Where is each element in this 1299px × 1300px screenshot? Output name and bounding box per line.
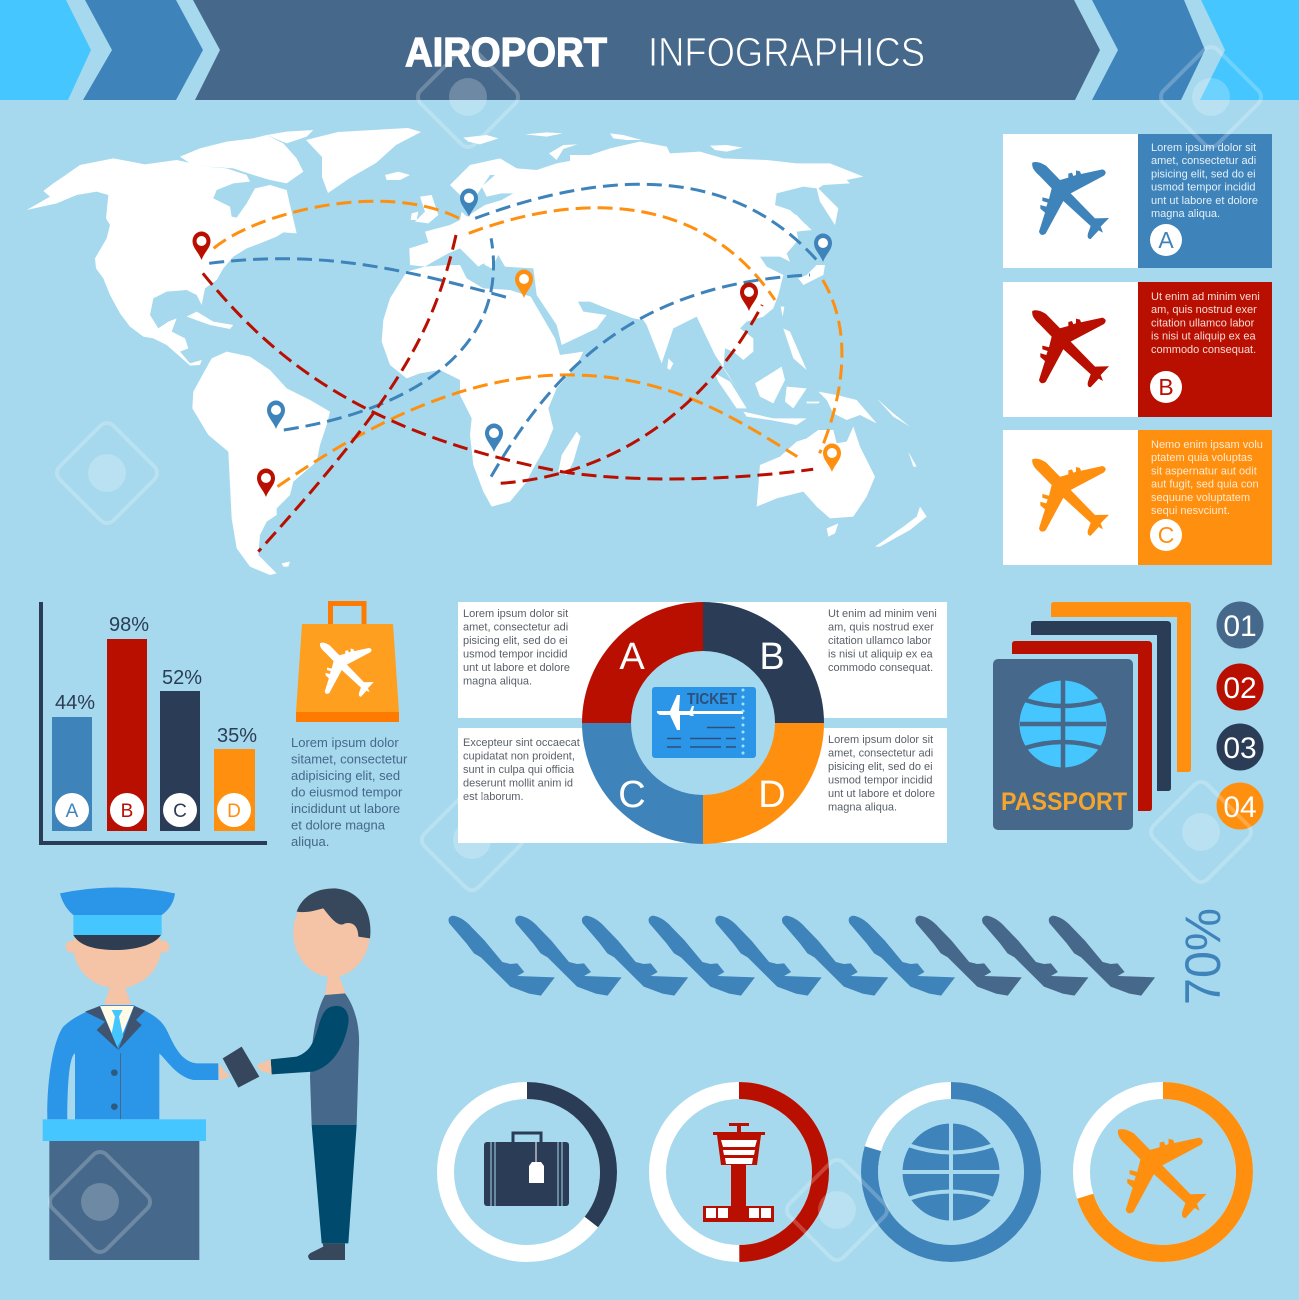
text bottom left: est laborum. <box>463 791 524 803</box>
04 <box>1216 782 1264 830</box>
01 <box>1216 602 1264 648</box>
text bottom right: amet, consectetur adi <box>828 748 933 760</box>
text top left: unt ut labore et dolore <box>463 662 570 674</box>
text top right: Ut enim ad minim veni <box>828 608 937 620</box>
icon: orange plane <box>1032 459 1109 536</box>
text top right: commodo consequat. <box>828 662 933 674</box>
Asia <box>570 133 863 408</box>
badge B <box>1150 371 1182 403</box>
bar B 98%: B <box>121 801 133 822</box>
agent <box>47 887 230 1119</box>
icon: red plane <box>1032 310 1109 387</box>
continents <box>27 128 927 575</box>
bar C 52%: C <box>173 801 187 822</box>
text block A: Lorem ipsum dolor sit <box>1151 142 1256 154</box>
text block B: citation ullamco labor <box>1151 318 1255 330</box>
donut chart <box>582 602 824 844</box>
bar D 35% <box>214 725 257 831</box>
Americas <box>27 130 330 575</box>
text block C <box>1151 439 1263 517</box>
text top right: citation ullamco labor <box>828 635 932 647</box>
text top left: pisicing elit, sed do ei <box>463 635 568 647</box>
text block C: ptatem quia voluptas <box>1151 452 1253 464</box>
flight routes <box>203 184 842 552</box>
Oceania <box>743 392 927 547</box>
icon: shopping bag <box>296 604 399 722</box>
document <box>223 1047 259 1088</box>
text block under bag <box>291 735 408 849</box>
pictogram row: 7 of 10 planes, 70% <box>448 908 1231 1005</box>
icon: passports: PASSPORT <box>1001 788 1127 816</box>
text block under bag: Lorem ipsum dolor <box>291 735 399 750</box>
01: 01 <box>1223 610 1257 643</box>
text bottom left: deserunt mollit anim id <box>463 778 573 790</box>
title: AIROPORT <box>405 29 607 75</box>
text block under bag: aliqua. <box>291 834 329 849</box>
text bottom right: unt ut labore et dolore <box>828 788 935 800</box>
text bottom right <box>828 734 935 814</box>
02: 02 <box>1223 672 1257 705</box>
text top left: amet, consectetur adi <box>463 622 568 634</box>
03: 03 <box>1223 732 1257 765</box>
Europe, Africa, Arabia <box>382 132 633 507</box>
text bottom left: cupidatat non proident, <box>463 750 575 762</box>
icon: globe <box>901 1122 1001 1222</box>
text block A: unt ut labore et dolore <box>1151 195 1258 207</box>
donut chart: A <box>619 636 645 678</box>
icon: blue plane <box>1032 162 1109 239</box>
donut chart: B <box>759 636 785 678</box>
illustration: check-in desk and passenger <box>43 887 370 1260</box>
text block under bag: adipisicing elit, sed <box>291 768 400 783</box>
ring: control tower <box>658 1090 820 1254</box>
panel: ticket donut <box>458 602 947 844</box>
text top left: usmod tempor incidid <box>463 648 568 660</box>
title: INFOGRAPHICS <box>648 29 925 75</box>
title <box>405 29 925 75</box>
text block A: magna aliqua. <box>1151 208 1220 220</box>
bar C 52% <box>160 667 202 831</box>
text block A: usmod tempor incidid <box>1151 182 1256 194</box>
bar C 52%: 52% <box>162 667 202 689</box>
text bottom right: magna aliqua. <box>828 802 897 814</box>
text bottom right: usmod tempor incidid <box>828 774 933 786</box>
ring: luggage <box>446 1090 608 1254</box>
badge B: B <box>1158 374 1174 400</box>
text block B: is nisi ut aliquip ex ea <box>1151 330 1256 342</box>
bar A 44%: A <box>66 801 79 822</box>
text top left: magna aliqua. <box>463 676 532 688</box>
text bottom left <box>463 737 580 803</box>
70% label: 70% <box>1175 908 1231 1005</box>
text block A: amet, consectetur adi <box>1151 155 1256 167</box>
text block C: sit aspernatur aut odit <box>1151 466 1257 478</box>
desk <box>43 1119 206 1260</box>
bar A 44% <box>52 692 95 831</box>
icon: suitcase <box>484 1133 569 1206</box>
03 <box>1216 724 1264 770</box>
bar D 35%: 35% <box>217 725 257 747</box>
text bottom left: sunt in culpa qui officia <box>463 764 575 776</box>
text block under bag: sitamet, consectetur <box>291 752 408 766</box>
text block C: aut fugit, sed quia con <box>1151 478 1259 490</box>
icon: ticket <box>652 687 756 758</box>
icon: passports <box>993 602 1191 830</box>
04: 04 <box>1223 791 1257 824</box>
Greenland <box>306 128 421 193</box>
icon: tower <box>703 1123 774 1222</box>
ring: plane <box>1082 1090 1244 1254</box>
text bottom right: Lorem ipsum dolor sit <box>828 734 933 746</box>
header banner <box>0 0 1299 100</box>
panel: plane A <box>1003 134 1272 268</box>
icon: ticket: TICKET <box>687 691 737 708</box>
text block B: commodo consequat. <box>1151 344 1256 356</box>
text block B: am, quis nostrud exer <box>1151 304 1257 316</box>
02 <box>1216 664 1264 710</box>
text block A: pisicing elit, sed do ei <box>1151 168 1256 180</box>
text bottom right: pisicing elit, sed do ei <box>828 761 933 773</box>
panel: plane B <box>1003 282 1272 417</box>
text block C: sequune voluptatem <box>1151 492 1250 504</box>
bar chart <box>39 602 267 845</box>
bar B 98%: 98% <box>109 614 149 636</box>
numbered list <box>1216 602 1264 830</box>
badge C <box>1150 519 1182 551</box>
text top right: is nisi ut aliquip ex ea <box>828 648 933 660</box>
text block under bag: et dolore magna <box>291 818 386 832</box>
panel: plane C <box>1003 430 1272 565</box>
globe on passport <box>1020 680 1106 768</box>
badge A <box>1150 224 1182 256</box>
text top right <box>828 608 937 674</box>
text block under bag: do eiusmod tempor <box>291 784 403 800</box>
badge C: C <box>1158 522 1174 548</box>
text block C: Nemo enim ipsam volu <box>1151 439 1263 451</box>
badge A: A <box>1158 227 1174 253</box>
text block B <box>1151 291 1260 356</box>
bar B 98% <box>107 614 149 831</box>
text top left <box>463 608 570 688</box>
text block B: Ut enim ad minim veni <box>1151 291 1260 303</box>
text top left: Lorem ipsum dolor sit <box>463 608 568 620</box>
text block under bag: incididunt ut labore <box>291 801 400 816</box>
donut chart: D <box>758 774 786 816</box>
donut chart: C <box>618 774 646 816</box>
text block C: sequi nesvciunt. <box>1151 505 1230 517</box>
world map with flight routes <box>27 128 927 575</box>
text bottom left: Excepteur sint occaecat <box>463 737 580 749</box>
text block A <box>1151 142 1258 220</box>
location pins <box>192 188 841 497</box>
passenger <box>257 888 370 1260</box>
icon: orange plane <box>1118 1129 1207 1218</box>
bar A 44%: 44% <box>55 692 95 714</box>
bar D 35%: D <box>227 801 241 822</box>
ring: globe <box>870 1090 1032 1254</box>
text top right: am, quis nostrud exer <box>828 622 934 634</box>
